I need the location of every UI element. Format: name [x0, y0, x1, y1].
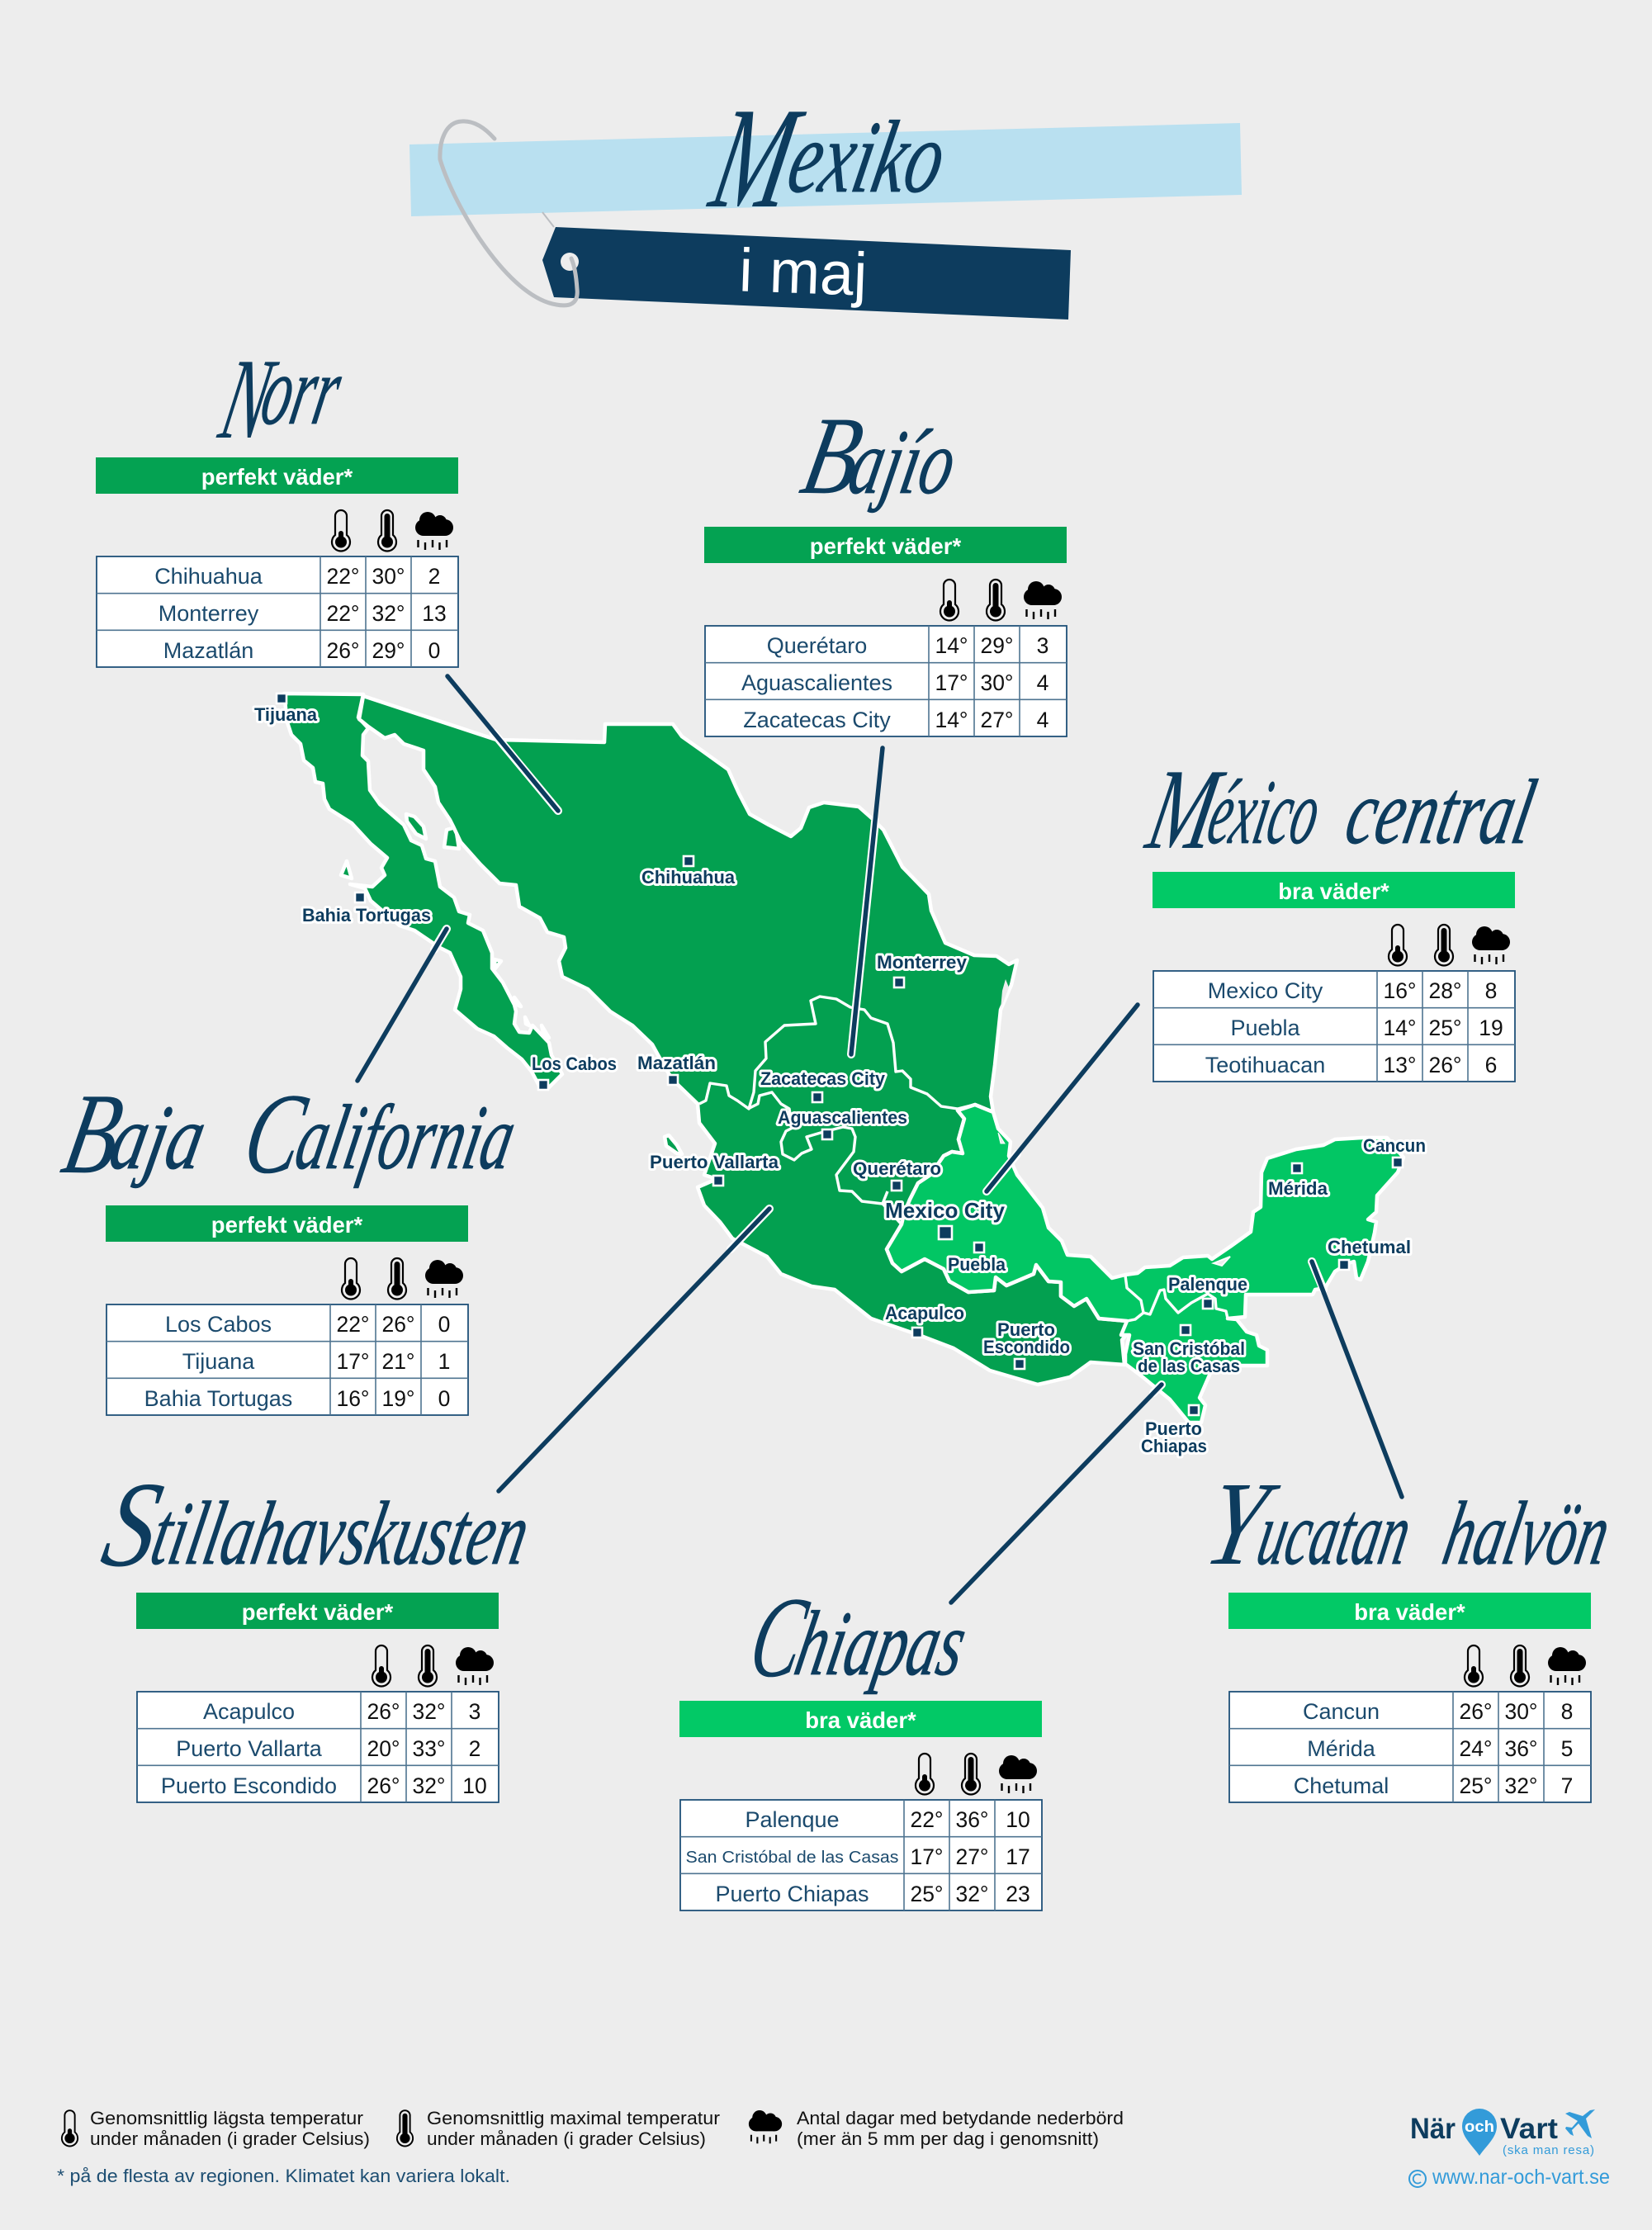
climate table: 27°	[955, 1844, 989, 1869]
logo wordmark När: När	[1410, 2113, 1456, 2145]
climate table: Los Cabos	[165, 1312, 272, 1337]
city: Bahia Tortugas	[302, 892, 431, 926]
climate table: Mazatlán	[163, 638, 253, 663]
heading: Stillahavskusten	[92, 1457, 538, 1593]
climate table: 17°	[910, 1844, 944, 1869]
city: Acapulco	[885, 1303, 964, 1338]
leader line: Bajío	[851, 748, 883, 1054]
heading: México central: éxico	[1200, 761, 1329, 864]
city: Chihuahua	[641, 856, 736, 888]
climate table: 0	[428, 638, 440, 663]
city: Bahia Tortugas: Bahia Tortugas	[302, 905, 431, 926]
climate table: 2	[428, 564, 440, 589]
column icons	[1389, 925, 1510, 965]
column icons	[372, 1645, 494, 1686]
city: Aguascalientes: Aguascalientes	[778, 1107, 907, 1128]
city: Puerto Vallarta	[650, 1152, 779, 1186]
climate table: 4	[1037, 670, 1048, 695]
climate table: 20°	[367, 1736, 400, 1761]
city: Monterrey	[877, 952, 968, 987]
heading: Chiapas: C	[740, 1573, 817, 1702]
legend item: lowest temperature: Genomsnittlig lägsta temperatur	[90, 2108, 363, 2128]
weather bar	[704, 527, 1067, 563]
weather bar: bra väder*	[805, 1707, 916, 1733]
leader line: Chiapas	[951, 1385, 1162, 1603]
weather bar	[136, 1593, 499, 1629]
navy month tag	[542, 227, 1071, 320]
heading: Yucatan halvön: Y	[1195, 1456, 1287, 1590]
city: Querétaro: Querétaro	[853, 1158, 941, 1179]
city: Tijuana	[254, 694, 318, 725]
climate table: Zacatecas City	[743, 708, 891, 732]
legend item: highest temperature: under månaden (i grader Celsius)	[427, 2128, 706, 2149]
city: Mexico City	[885, 1198, 1006, 1239]
climate table: Cancun	[1303, 1699, 1380, 1724]
climate table	[680, 1800, 1042, 1910]
leader line: Norr	[447, 676, 558, 811]
climate table: 32°	[412, 1773, 446, 1798]
climate table: 30°	[372, 564, 405, 589]
climate table: 33°	[412, 1736, 446, 1761]
region: Norr, Bajío and Stillahavskusten	[359, 696, 1131, 1385]
weather bar	[96, 457, 458, 494]
leader line: Baja California	[357, 929, 447, 1081]
city: Zacatecas City: Zacatecas City	[760, 1068, 886, 1089]
climate table: Puerto Vallarta	[176, 1736, 323, 1761]
city: Palenque: Palenque	[1168, 1274, 1247, 1295]
weather bar	[106, 1205, 468, 1242]
heading: Bajío: B	[793, 393, 873, 518]
climate table: 23	[1006, 1882, 1030, 1906]
city: Cancun: Cancun	[1363, 1135, 1426, 1156]
panel: México central	[1153, 872, 1515, 1082]
heading: Bajío: ajío	[841, 411, 965, 514]
tag hole	[561, 253, 579, 271]
climate table: 29°	[980, 633, 1014, 658]
climate table: Puebla	[1230, 1016, 1301, 1040]
climate table: 8	[1485, 978, 1497, 1003]
climate table	[137, 1692, 499, 1802]
climate table: Teotihuacan	[1205, 1053, 1325, 1077]
heading: Baja California: alifornia	[288, 1087, 524, 1189]
heading: Chiapas	[740, 1573, 975, 1702]
city: Aguascalientes	[778, 1107, 907, 1139]
map of Mexico	[284, 694, 1403, 1423]
city: Chihuahua: Chihuahua	[641, 867, 736, 888]
city: Mazatlán: Mazatlán	[637, 1053, 716, 1073]
heading: Norr: orr	[253, 336, 351, 446]
icon: map pin	[1462, 2109, 1497, 2156]
heading: Stillahavskusten: S	[92, 1457, 173, 1593]
climate table: 28°	[1428, 978, 1462, 1003]
climate table: 26°	[367, 1773, 400, 1798]
climate table: 26°	[1459, 1699, 1493, 1724]
climate table: Mérida	[1307, 1736, 1376, 1761]
city: Puerto Escondido: Escondido	[983, 1337, 1070, 1357]
climate table: 26°	[367, 1699, 400, 1724]
climate table: Bahia Tortugas	[144, 1386, 292, 1411]
leader line: México central	[987, 1005, 1138, 1191]
climate table	[705, 626, 1067, 736]
heading: Chiapas: hiapas	[788, 1593, 975, 1695]
climate table: 32°	[1504, 1773, 1538, 1798]
panel: Norr	[96, 457, 458, 667]
climate table: 10	[462, 1773, 487, 1798]
tag string loop	[440, 121, 577, 305]
climate table: 26°	[326, 638, 360, 663]
climate table: 25°	[910, 1882, 944, 1906]
climate table: Aguascalientes	[741, 670, 892, 695]
legend	[57, 2108, 1124, 2186]
panel: Chiapas	[679, 1701, 1042, 1910]
climate table: 32°	[955, 1882, 989, 1906]
city: Puerto Escondido	[983, 1319, 1070, 1369]
weather bar: perfekt väder*	[810, 533, 962, 559]
city: Mérida: Mérida	[1268, 1178, 1328, 1199]
city: Cancun	[1363, 1135, 1426, 1167]
climate table	[107, 1304, 468, 1415]
climate table: 3	[1037, 633, 1048, 658]
city: Puebla	[948, 1243, 1006, 1275]
website url: www.nar-och-vart.se	[1432, 2166, 1610, 2189]
climate table: 0	[438, 1312, 450, 1337]
weather bar: perfekt väder*	[211, 1212, 363, 1238]
climate table: 14°	[935, 633, 968, 658]
city: Zacatecas City	[760, 1068, 886, 1102]
heading: Bajío	[793, 393, 965, 518]
heading: Yucatan halvön	[1195, 1456, 1619, 1590]
weather bar: perfekt väder*	[242, 1599, 394, 1625]
heading: Baja California: B	[53, 1069, 133, 1198]
legend item: rainy days: Antal dagar med betydande nederbörd	[797, 2108, 1124, 2128]
icon: copyright	[1409, 2171, 1426, 2187]
legend item: rainy days: (mer än 5 mm per dag i genomsnitt)	[797, 2128, 1099, 2149]
city: Tijuana: Tijuana	[254, 704, 318, 725]
panel: Bajío	[704, 527, 1067, 736]
heading: Baja California: C	[234, 1069, 317, 1198]
heading: México central: M	[1137, 745, 1233, 874]
climate table: 10	[1006, 1807, 1030, 1832]
climate table: 17	[1006, 1844, 1030, 1869]
panel: Baja California	[106, 1205, 468, 1415]
climate table: 36°	[1504, 1736, 1538, 1761]
icon: airplane	[1565, 2109, 1595, 2138]
column icons	[332, 510, 453, 551]
climate table	[1229, 1692, 1591, 1802]
main title	[698, 78, 956, 239]
climate table: 19°	[381, 1386, 415, 1411]
climate table: 32°	[372, 601, 405, 626]
city: Puebla: Puebla	[948, 1254, 1006, 1275]
city: Puerto Chiapas: Chiapas	[1141, 1436, 1207, 1456]
climate table: 22°	[910, 1807, 944, 1832]
city: Acapulco: Acapulco	[885, 1303, 964, 1323]
region: México central, Chiapas and Yucatán	[887, 1105, 1403, 1423]
climate table: Chetumal	[1294, 1773, 1389, 1798]
climate table: Mexico City	[1208, 978, 1323, 1003]
city: Monterrey: Monterrey	[877, 952, 968, 973]
logo wordmark Vart: Vart	[1500, 2113, 1558, 2145]
column icons	[916, 1754, 1037, 1794]
city: Querétaro	[853, 1158, 941, 1191]
column icons	[1465, 1645, 1586, 1686]
heading: México central: central	[1338, 761, 1544, 864]
weather bar	[679, 1701, 1042, 1737]
climate table: 0	[438, 1386, 450, 1411]
climate table: 32°	[412, 1699, 446, 1724]
title banner: Mexiko i maj	[409, 78, 1242, 320]
legend item: rainy days	[749, 2108, 1124, 2149]
city: Los Cabos	[532, 1053, 617, 1090]
weather bar	[1228, 1593, 1591, 1629]
city: Chetumal: Chetumal	[1328, 1237, 1411, 1257]
climate table: San Cristóbal de las Casas	[685, 1849, 898, 1867]
city: San Cristóbal de las Casas: de las Casas	[1138, 1356, 1240, 1376]
climate table: 16°	[336, 1386, 370, 1411]
climate table: 22°	[326, 564, 360, 589]
climate table: Acapulco	[203, 1699, 295, 1724]
legend item: highest temperature: Genomsnittlig maximal temperatur	[427, 2108, 720, 2128]
climate table	[1153, 971, 1515, 1082]
city: San Cristóbal de las Casas: San Cristóbal	[1133, 1338, 1245, 1359]
city: Palenque	[1168, 1274, 1247, 1309]
climate table: 19	[1479, 1016, 1503, 1040]
climate table: 2	[469, 1736, 480, 1761]
climate table: 25°	[1428, 1016, 1462, 1040]
tag string thin segment	[542, 212, 554, 227]
climate table: 16°	[1383, 978, 1417, 1003]
climate table: 21°	[381, 1349, 415, 1374]
main title: exiko	[779, 100, 956, 215]
city: Mexico City: Mexico City	[885, 1198, 1006, 1223]
climate table: 22°	[326, 601, 360, 626]
climate table: 7	[1561, 1773, 1573, 1798]
climate table: 6	[1485, 1053, 1497, 1077]
legend item: highest temperature	[397, 2108, 720, 2149]
climate table: 17°	[336, 1349, 370, 1374]
climate table: 25°	[1459, 1773, 1493, 1798]
region: Baja California	[284, 694, 562, 1087]
panel: Yucatan halvön	[1228, 1593, 1591, 1802]
climate table: 5	[1561, 1736, 1573, 1761]
city: Puerto Vallarta: Puerto Vallarta	[650, 1152, 779, 1172]
climate table: 3	[469, 1699, 480, 1724]
subtitle: i maj: i maj	[738, 235, 869, 309]
heading: México central	[1137, 745, 1544, 874]
climate table: 13°	[1383, 1053, 1417, 1077]
climate table: Tijuana	[182, 1349, 255, 1374]
city: Mazatlán	[637, 1053, 716, 1085]
climate table: 29°	[372, 638, 405, 663]
leader line: Stillahavskusten	[499, 1209, 769, 1491]
climate table: 1	[438, 1349, 450, 1374]
climate table: 30°	[980, 670, 1014, 695]
climate table: 26°	[1428, 1053, 1462, 1077]
climate table: 36°	[955, 1807, 989, 1832]
climate table: Monterrey	[159, 601, 259, 626]
climate table: 14°	[935, 708, 968, 732]
weather bar: perfekt väder*	[201, 464, 353, 490]
weather bar: bra väder*	[1354, 1599, 1465, 1625]
main title: M	[698, 78, 814, 239]
city: Mérida	[1268, 1163, 1328, 1199]
logo: När och Vart	[1409, 2109, 1610, 2189]
logo tagline: (ska man resa)	[1503, 2143, 1594, 2157]
climate table: 4	[1037, 708, 1048, 732]
weather bar	[1153, 872, 1515, 908]
city: Puerto Escondido: Puerto	[997, 1319, 1055, 1340]
heading: Norr: N	[210, 334, 286, 463]
climate table: 8	[1561, 1699, 1573, 1724]
legend item: lowest temperature: under månaden (i grader Celsius)	[90, 2128, 370, 2149]
climate table: 14°	[1383, 1016, 1417, 1040]
legend item: lowest temperature	[62, 2108, 370, 2149]
climate table: Chihuahua	[154, 564, 263, 589]
city: Puerto Chiapas: Puerto	[1145, 1418, 1202, 1439]
climate table: 26°	[381, 1312, 415, 1337]
weather bar: bra väder*	[1278, 878, 1389, 904]
footnote: * på de flesta av regionen. Klimatet kan variera lokalt.	[57, 2166, 510, 2186]
heading: Baja California: aja	[102, 1087, 215, 1189]
climate table: 17°	[935, 670, 968, 695]
city: Los Cabos: Los Cabos	[532, 1053, 617, 1074]
city: San Cristóbal de las Casas	[1133, 1325, 1245, 1376]
climate table: 13	[422, 601, 447, 626]
climate table: 24°	[1459, 1736, 1493, 1761]
climate table: Querétaro	[767, 633, 867, 658]
panel: Stillahavskusten	[136, 1593, 499, 1802]
heading: Stillahavskusten: tillahavskusten	[144, 1484, 538, 1584]
column icons	[342, 1258, 463, 1299]
column icons	[940, 580, 1062, 620]
climate table	[97, 556, 458, 667]
city: Puerto Chiapas	[1141, 1405, 1207, 1456]
light blue banner	[409, 123, 1242, 216]
logo word: och: och	[1465, 2119, 1494, 2136]
climate table: Palenque	[745, 1807, 840, 1832]
climate table: 22°	[336, 1312, 370, 1337]
climate table: Puerto Chiapas	[715, 1882, 869, 1906]
leader line: Yucatan halvön	[1312, 1262, 1402, 1497]
city: Chetumal	[1328, 1237, 1411, 1270]
heading: Baja California	[53, 1069, 524, 1198]
climate table: 30°	[1504, 1699, 1538, 1724]
climate table: 27°	[980, 708, 1014, 732]
climate table: Puerto Escondido	[161, 1773, 337, 1798]
heading: Yucatan halvön: ucatan	[1250, 1484, 1420, 1584]
